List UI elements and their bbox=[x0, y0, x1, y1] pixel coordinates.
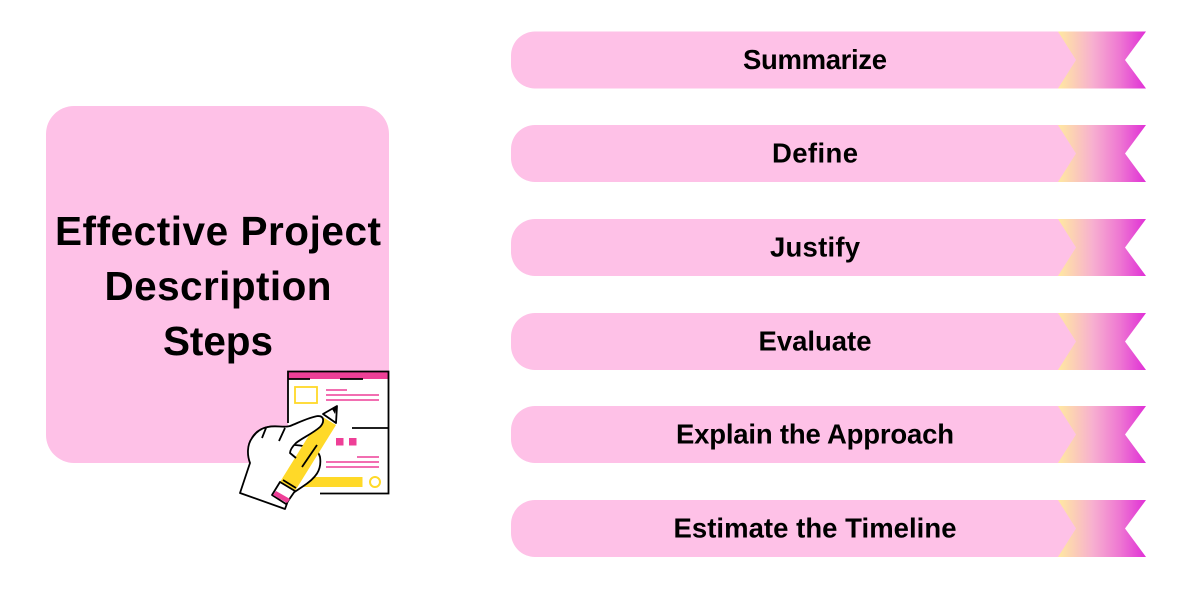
title bbox=[55, 208, 381, 364]
icon: hand with pencil on document bbox=[240, 371, 388, 509]
ribbon: Explain the Approach bbox=[511, 406, 1146, 463]
ribbon: Define: Define bbox=[772, 138, 858, 168]
ribbon: Justify bbox=[511, 219, 1146, 276]
title: Steps bbox=[163, 318, 273, 364]
panel: main title card bbox=[46, 106, 389, 463]
ribbon: Define bbox=[511, 125, 1146, 182]
title: Description bbox=[104, 263, 332, 309]
ribbon: Estimate the Timeline: Estimate the Timeline bbox=[674, 512, 956, 544]
title: Effective Project bbox=[55, 208, 381, 254]
ribbon: Summarize bbox=[511, 32, 1146, 88]
ribbon: Estimate the Timeline bbox=[511, 500, 1146, 557]
index finger over pencil bbox=[255, 416, 323, 470]
pencil bbox=[272, 406, 337, 504]
ribbon: Evaluate: Evaluate bbox=[758, 326, 872, 356]
hand palm bbox=[240, 427, 320, 509]
ribbon: Justify: Justify bbox=[770, 232, 861, 262]
ribbon: Evaluate bbox=[511, 313, 1146, 370]
ribbon: Explain the Approach: Explain the Approach bbox=[676, 418, 954, 450]
document sheet bbox=[288, 371, 388, 494]
finger outlines bbox=[252, 416, 323, 458]
ribbon: Summarize: Summarize bbox=[743, 44, 887, 75]
